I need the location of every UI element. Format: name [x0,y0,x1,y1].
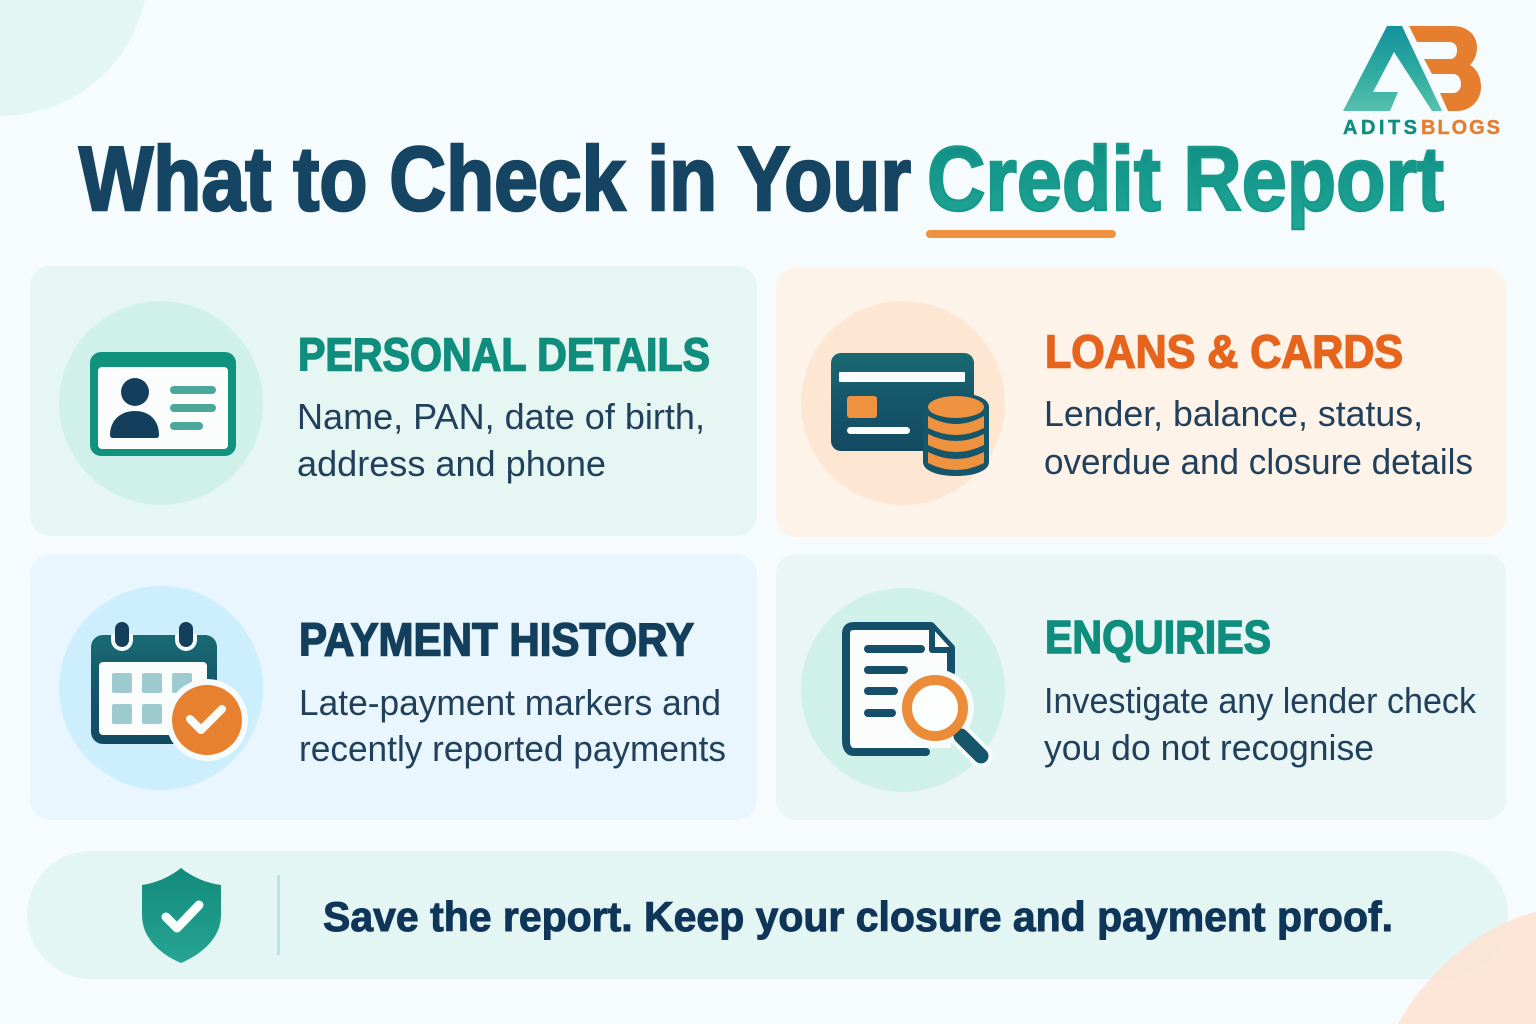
text: enquiries body: Investigate any lender check [1044,680,1477,721]
heading: loans and cards: LOANS & CARDS [1045,326,1403,378]
text: enquiries body [1044,680,1477,768]
text: loans and cards body [1044,393,1473,482]
title: What to Check in Your [79,129,911,230]
heading: personal details: PERSONAL DETAILS [298,328,710,380]
text: personal details body: Name, PAN, date of birth, [297,396,705,437]
icon: credit card and coins [831,353,989,476]
text: payment history body: Late-payment markers and [299,682,721,723]
logo [1343,26,1500,139]
panel: enquiries [776,554,1506,820]
panel: payment history [30,554,757,820]
logo: ADITS [1343,117,1417,139]
panel: bottom reminder bar [27,851,1508,979]
text: reminder: Save the report. Keep your closure and payment proof. [323,893,1393,940]
text: loans and cards body: Lender, balance, status, [1044,393,1423,434]
title: Credit Report [927,129,1444,230]
logo: BLOGS [1421,117,1500,139]
text: loans and cards body: overdue and closure details [1044,441,1473,482]
icon: document with magnifier [846,626,981,756]
text: personal details body [297,396,705,484]
icon: id card [90,352,236,456]
heading: enquiries: ENQUIRIES [1045,611,1271,663]
icon: shield with check [142,868,221,963]
text: personal details body: address and phone [297,443,606,484]
text: enquiries body: you do not recognise [1044,727,1374,768]
text: payment history body [299,682,726,769]
panel: loans and cards [776,267,1506,537]
heading: payment history: PAYMENT HISTORY [299,614,694,666]
text: payment history body: recently reported payments [299,728,726,769]
panel: personal details [30,266,757,536]
icon: calendar with check badge [91,622,248,761]
title [79,129,1444,238]
